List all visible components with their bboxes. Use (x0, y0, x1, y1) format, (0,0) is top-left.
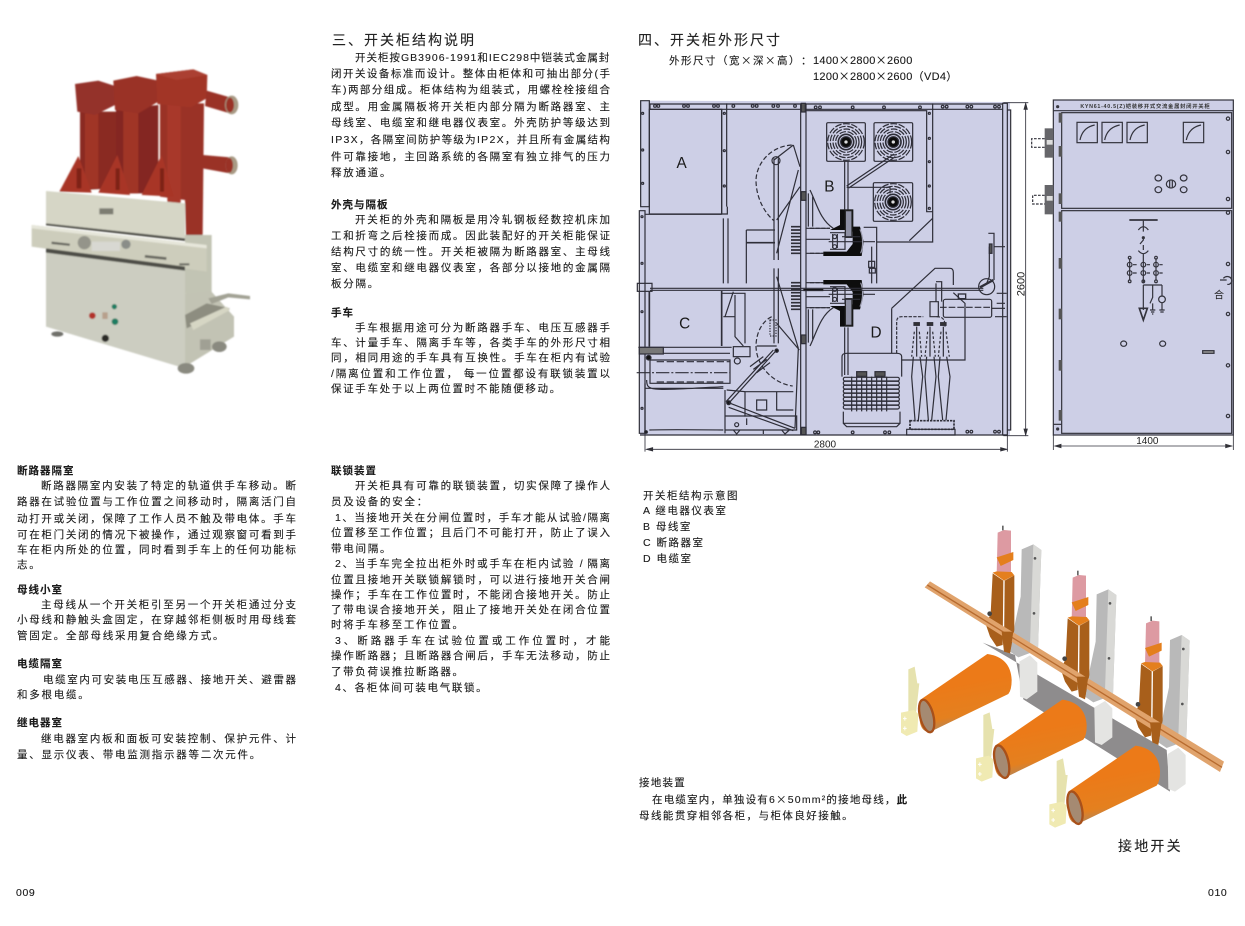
cabinet panels (1053, 100, 1233, 435)
interlock symbol: 合 (1214, 289, 1224, 302)
upper arm and dashed swing arc (756, 145, 800, 260)
insulator bushing 3 (873, 183, 913, 221)
text block: interlocking device: 了带电误合接地开关，阻止了接地开关处在闭合位置 (331, 604, 610, 616)
compartment letters: C (679, 315, 690, 332)
text block: handcart (331, 306, 610, 395)
text block: earthing device: 母线能贯穿相邻各柜，与柜体良好接触。 (639, 810, 854, 822)
text block: interlocking device: 1、当接地开关在分闸位置时，手车才能从试验/隔离 (335, 512, 610, 524)
upper contact box (791, 190, 875, 256)
compartment letters: D (870, 324, 882, 341)
compartment letters: A (677, 155, 688, 172)
surge arrester (930, 282, 1005, 317)
text block: interlocking device: 4、各柜体间可装电气联锁。 (335, 682, 488, 694)
text block: structure description: 成型。用金属隔板将开关柜内部分隔为断路器室、主 (331, 101, 610, 113)
text block: overall dimensions: 1200×2800×2600（VD4） (813, 68, 958, 84)
text block: cable compartment: 电缆室内可安装电压互感器、接地开关、避雷器 (43, 674, 296, 686)
switch unit 1 (901, 526, 1041, 736)
text block: busbar compartment: 小母线和静触头盒固定，在穿越邻柜侧板时用母线套 (17, 614, 296, 626)
text block: circuit breaker compartment: 断路器隔室内安装了特定的轨道供手车移动。断 (41, 480, 296, 492)
text block: busbar compartment: 主母线从一个开关柜引至另一个开关柜通过分支 (41, 599, 296, 611)
text block: circuit breaker compartment: 动打开或关闭，保障了工作人员不触及带电体。手车 (17, 513, 296, 525)
text block: handcart: 同，相同用途的手车具有互换性。手车在柜内有试验 (331, 352, 610, 364)
text block: handcart: 手车根据用途可分为断路器手车、电压互感器手 (355, 322, 610, 334)
illustration: earthing switch 3D model (901, 526, 1224, 828)
dimension: 2800 (645, 433, 1007, 452)
text block: interlocking device: 带电间隔。 (331, 543, 392, 555)
text block: shell and partition: 板分隔。 (331, 278, 380, 290)
text block: relay compartment: 继电器室 (17, 717, 63, 729)
compartment B outline (806, 103, 933, 242)
page number right: 010 (1208, 887, 1227, 899)
text block: overall dimensions: 外形尺寸（宽×深×高）：1400×2800×2600 (669, 52, 913, 68)
copper busbar (925, 581, 1224, 772)
legend: compartment key: D 电缆室 (643, 553, 692, 565)
text block: handcart: 保证手车处于以上两位置时不能随便移动。 (331, 383, 562, 395)
earthing switch (979, 233, 1007, 317)
text block: structure description: IP3X，各隔室间防护等级为IP2X，并且所有金属结构 (331, 134, 611, 146)
text block: circuit breaker compartment: 志。 (17, 559, 42, 571)
indicator lamps and switch (1155, 175, 1187, 193)
insulator bushing 2 (874, 123, 913, 161)
dimension: 2600: 2600 (1015, 272, 1027, 296)
text block: circuit breaker compartment: 车在柜内所处的位置，同时看到手车上的任何功能标 (17, 544, 296, 556)
text block: interlocking device: 2、当手车完全拉出柜外时或手车在柜内试验 / 隔离 (335, 558, 610, 570)
compartment letters: B (824, 178, 834, 195)
text block: handcart: /隔离位置和工作位置， 每一位置都设有联锁装置以 (331, 368, 610, 380)
text block: interlocking device (331, 465, 610, 694)
text block: shell and partition: 外壳与隔板 (331, 199, 388, 211)
legend: compartment key: 开关柜结构示意图 (643, 490, 739, 502)
lower arm and dashed swing arc (756, 268, 799, 428)
legend: compartment key: B 母线室 (643, 521, 692, 533)
text block: interlocking device: 操作断路器；且断路器合闸后，手车无法移动，防止 (331, 650, 610, 662)
text block: shell and partition: 开关柜的外壳和隔板是用冷轧钢板经数控机床加 (355, 214, 610, 226)
text block: interlocking device: 位置移至工作位置；且后门不可能打开，防止了误入 (331, 527, 610, 539)
text block: structure description (331, 52, 611, 179)
text block: earthing device: 接地装置 (639, 777, 686, 789)
text block: shell and partition (331, 199, 610, 290)
text block: shell and partition: 工和折弯之后栓接而成。因此装配好的开关柜能保证 (331, 230, 610, 242)
text block: cable compartment: 电缆隔室 (17, 658, 63, 670)
text block: cable compartment (17, 658, 296, 701)
dimension: 2800: 2800 (814, 439, 837, 450)
text block: handcart: 车、计量手车、隔离手车等，各类手车的外形尺寸相 (331, 337, 610, 349)
text block: busbar compartment: 管固定。全部母线采用复合绝缘方式。 (17, 630, 225, 642)
text block: interlocking device: 联锁装置 (331, 465, 377, 477)
insulator bushing 1 (827, 123, 865, 161)
text block: relay compartment: 量、显示仪表、带电监测指示器等二次元件。 (17, 749, 262, 761)
text block: structure description: 释放通道。 (331, 167, 392, 179)
page number left: 009 (16, 887, 35, 899)
cabinet frame (637, 101, 1011, 435)
switch unit 3 (1049, 616, 1190, 828)
voltage transformer (842, 327, 902, 427)
diagram: switchgear cross section (636, 100, 1028, 452)
text block: circuit breaker compartment: 可在柜门关闭的情况下被操作，通过观察窗可看到手 (17, 529, 296, 541)
fork tips over busbar (1002, 632, 1162, 745)
text block: shell and partition: 室、电缆室和继电器仪表室，各部分以接地的金属隔 (331, 262, 610, 274)
single line mimic diagram (1127, 220, 1165, 320)
text block: structure description: 母线室、电缆室和继电器仪表室。外壳防护等级达到 (331, 117, 610, 129)
legend: compartment key: C 断路器室 (643, 537, 704, 549)
withdrawable truck mechanism (637, 320, 797, 434)
text block: earthing device (639, 777, 908, 822)
caption: earthing switch: 接地开关 (1118, 838, 1183, 854)
busbar connections (845, 154, 895, 209)
text block: interlocking device: 操作；手车在工作位置时，不能闭合接地开关。防止 (331, 589, 610, 601)
dimension: 2600 (1003, 103, 1028, 436)
dimension: 1400 (1053, 435, 1233, 450)
diagram: switchgear front elevation (1031, 99, 1234, 450)
legend: compartment key (643, 490, 739, 565)
text block: interlocking device: 了带负荷误推拉断路器。 (331, 666, 465, 678)
text block: relay compartment (17, 716, 296, 761)
legend: compartment key: A 继电器仪表室 (643, 505, 727, 517)
cable terminals (907, 323, 955, 435)
text block: interlocking device: 员及设备的安全： (331, 496, 429, 508)
heading: section three: 三、开关柜结构说明 (332, 32, 476, 48)
photo: circuit breaker handcart (31, 68, 251, 374)
text block: earthing device: 在电缆室内，单独设有6×50mm²的接地母线，此 (652, 792, 908, 807)
text block: interlocking device: 3、断路器手车在试验位置或工作位置时，才能 (335, 635, 610, 647)
compartment letters (677, 155, 882, 341)
door hinges (1032, 128, 1053, 214)
text block: busbar compartment (17, 584, 296, 642)
text block: structure description: 闭开关设备标准而设计。整体由柜体和可抽出部分(手 (331, 68, 610, 80)
meters (1077, 122, 1204, 143)
switch unit 2 (976, 571, 1116, 782)
nameplate title: KYN61-40.5(Z)铠装移开式交流金属封闭开关柜 (1080, 102, 1210, 110)
text block: circuit breaker compartment: 路器在试验位置与工作位置之间移动时，隔离活门自 (17, 496, 296, 508)
text block: handcart: 手车 (331, 307, 354, 319)
compartment D outline (892, 268, 965, 360)
text block: circuit breaker compartment (17, 464, 296, 571)
text block: interlocking device: 位置且接地开关联锁解锁时，可以进行接地开关合闸 (331, 574, 610, 586)
contact side links (803, 227, 877, 290)
text block: structure description: 件可靠接地，主回路系统的各隔室有独立排气的压力 (331, 151, 610, 163)
text block: structure description: 车)两部分组成。柜体结构为组装式，用螺栓栓接组合 (331, 84, 610, 96)
text block: shell and partition: 结构尺寸的统一性。开关柜被隔为断路器室、主母线 (331, 246, 610, 258)
text block: relay compartment: 继电器室内板和面板可安装控制、保护元件、计 (41, 733, 296, 745)
main horizontal shaft (650, 288, 983, 290)
text block: overall dimensions (669, 52, 958, 84)
interlock symbol (1214, 277, 1232, 302)
base beam (983, 643, 1170, 792)
text block: cable compartment: 和多根电缆。 (17, 689, 90, 701)
text block: circuit breaker compartment: 断路器隔室 (17, 465, 74, 477)
dimension: 1400: 1400 (1136, 436, 1159, 447)
lower lamps and slot (1121, 341, 1214, 353)
heading: section four: 四、开关柜外形尺寸 (638, 32, 782, 48)
lower contact box (791, 280, 875, 346)
cabinet background (640, 101, 1010, 435)
compartment C (649, 291, 745, 347)
text block: interlocking device: 开关柜具有可靠的联锁装置，切实保障了操作人 (355, 480, 610, 492)
text block: interlocking device: 时将手车移至工作位置。 (331, 619, 465, 631)
text block: structure description: 开关柜按GB3906-1991和IEC298中铠装式金属封 (355, 52, 610, 64)
text block: busbar compartment: 母线小室 (17, 584, 63, 596)
